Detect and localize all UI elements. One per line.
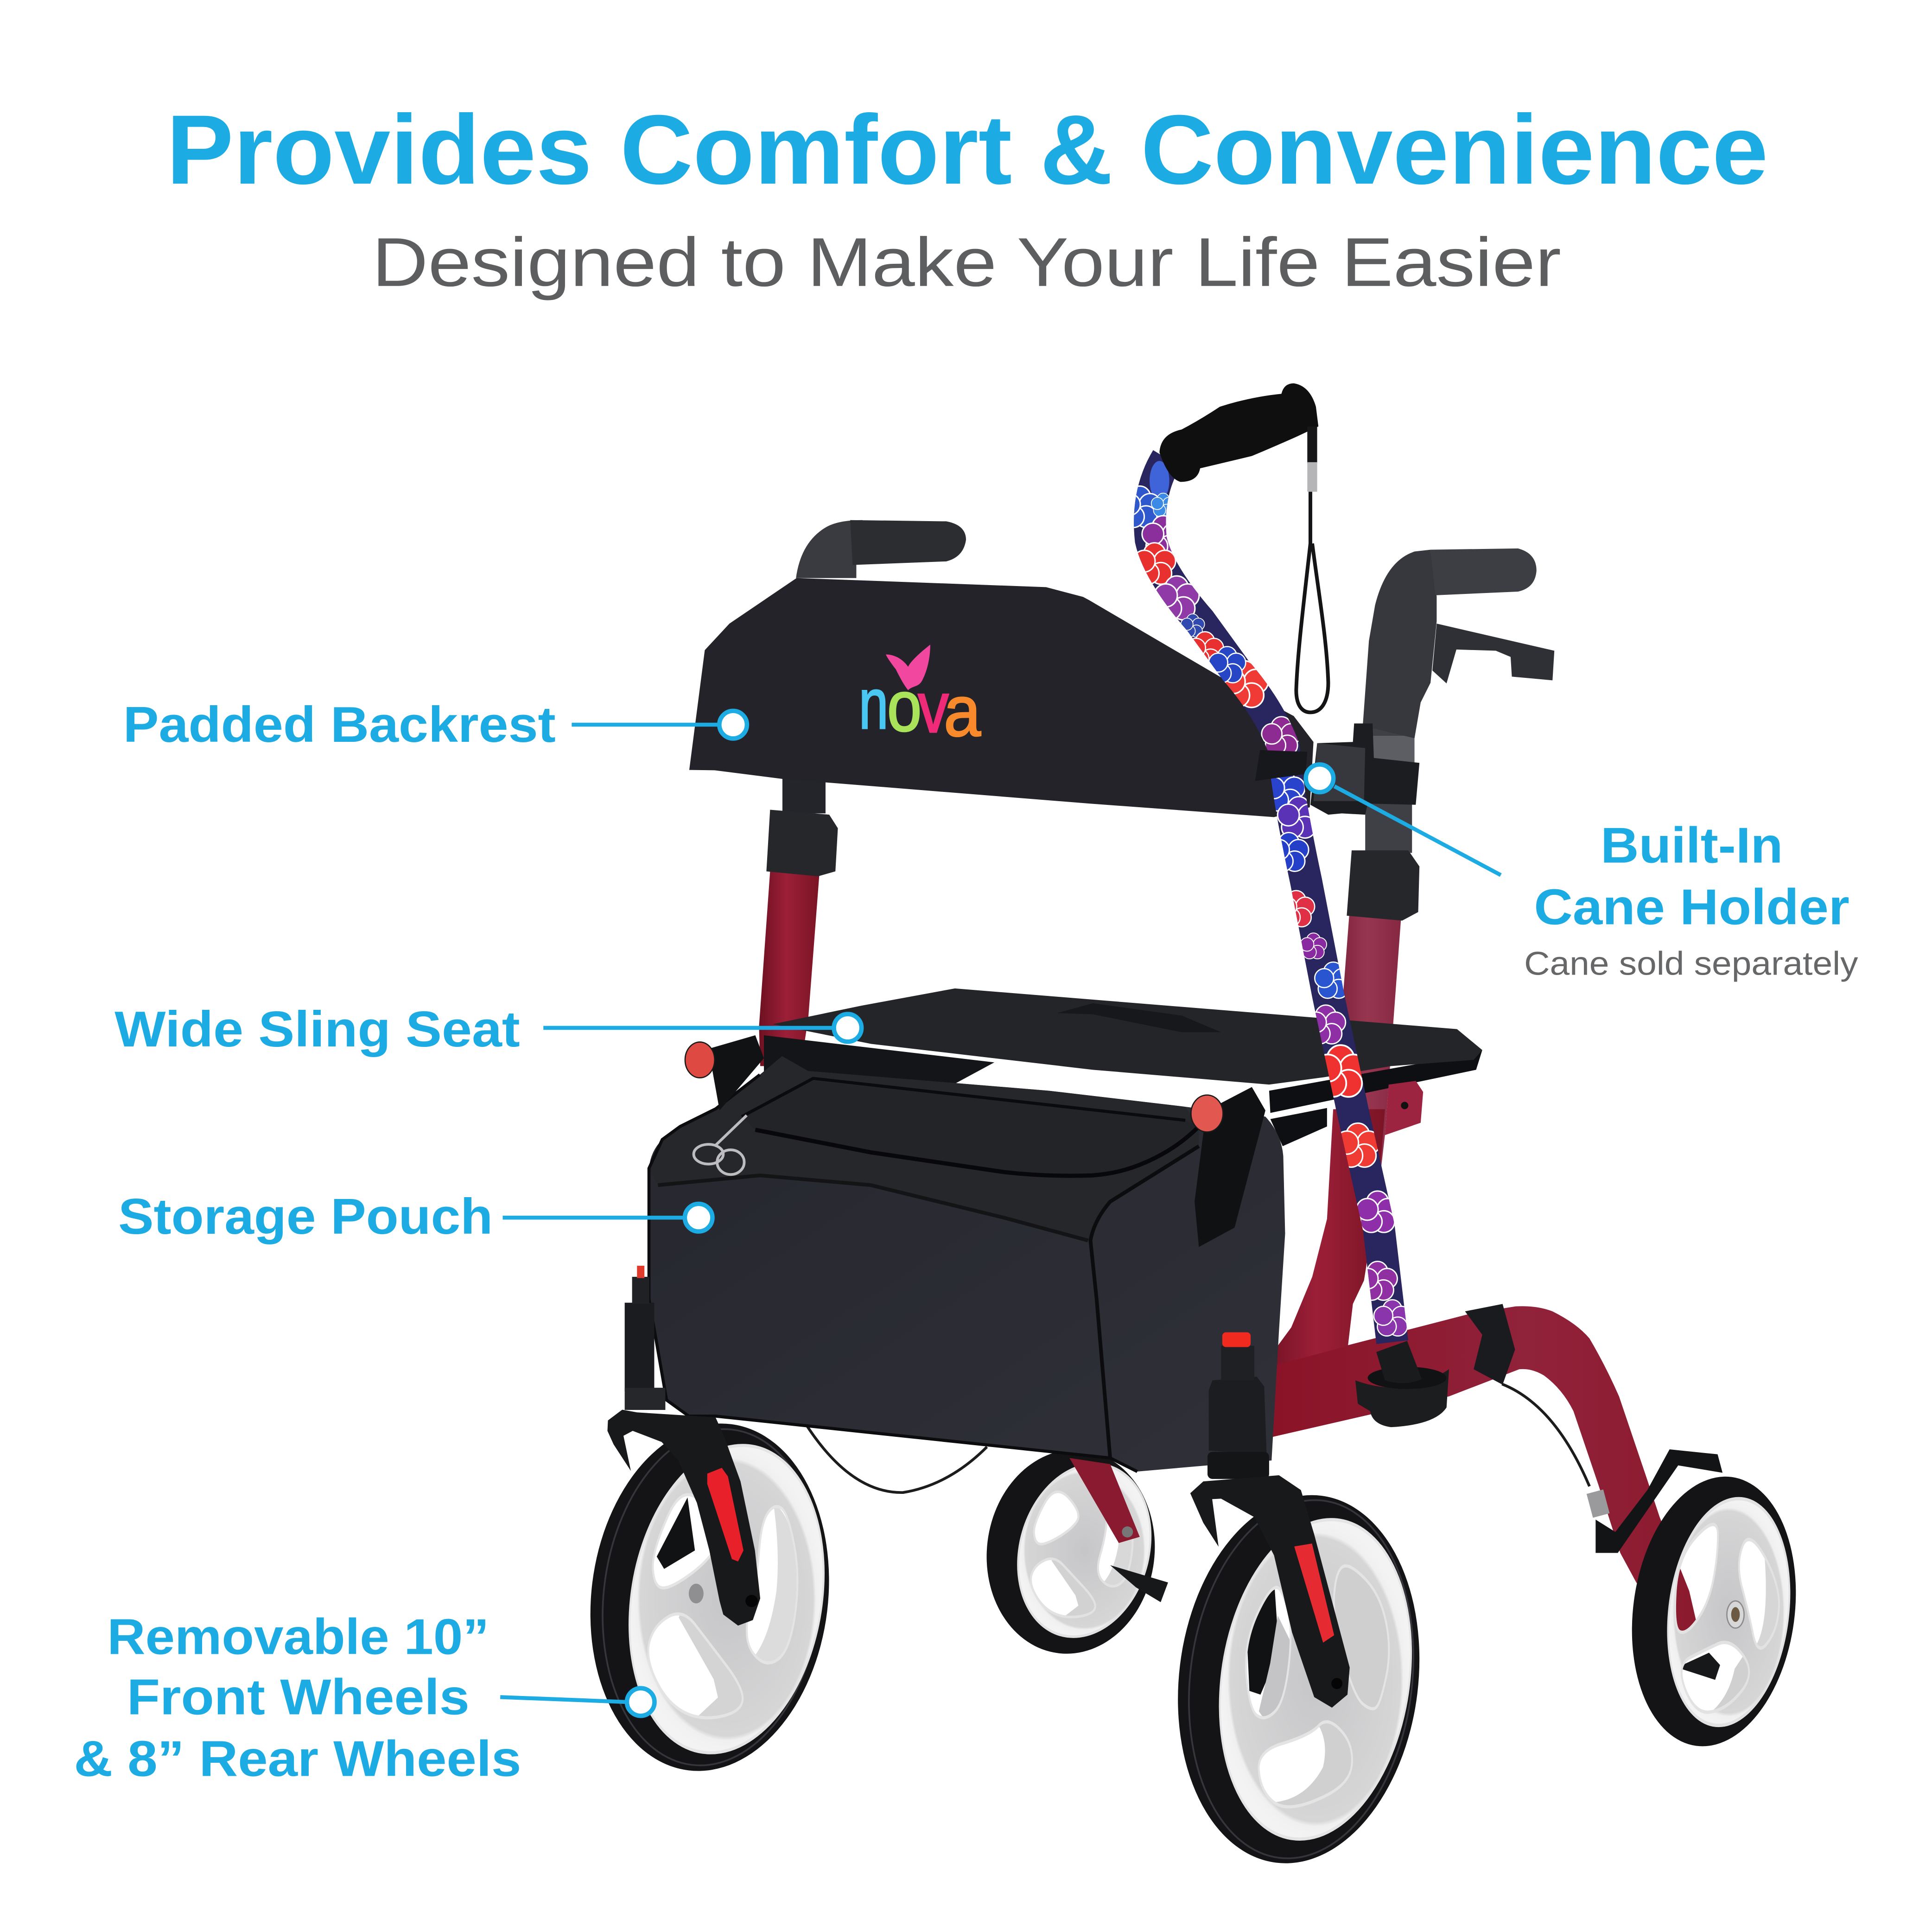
axle bolt <box>1331 1678 1342 1689</box>
callout: wide sling seat <box>114 1001 862 1058</box>
marker dot <box>685 1204 712 1231</box>
frame: rear arch and leg <box>1260 1306 1700 1639</box>
nova logo <box>859 644 981 751</box>
cane band <box>1255 750 1307 781</box>
fork neck <box>625 1388 665 1410</box>
leader line <box>1335 786 1501 875</box>
wide sling seat <box>773 988 1482 1084</box>
dark bar behind <box>1247 1579 1279 1695</box>
right reflector <box>1191 1095 1223 1132</box>
marker dot <box>1306 765 1334 792</box>
left upper column <box>782 777 826 813</box>
leader line <box>572 724 719 726</box>
velcro strap <box>1195 1087 1265 1247</box>
label: Storage Pouch <box>118 1188 493 1245</box>
fork body <box>1190 1475 1350 1708</box>
leader line <box>500 1697 627 1702</box>
right collar <box>1347 850 1419 921</box>
marker dot <box>834 1014 862 1042</box>
pouch top flap <box>649 1056 1199 1240</box>
label: Removable 10” <box>107 1608 489 1665</box>
back wheel, right side <box>1632 1476 1796 1746</box>
front seam <box>1090 1146 1199 1458</box>
left reflector <box>685 1042 715 1078</box>
front wheel, right <box>1157 1481 1440 1877</box>
label: Cane Holder <box>1534 879 1849 936</box>
title: Provides Comfort & Convenience <box>166 95 1768 205</box>
lower seat bar <box>1271 1108 1327 1146</box>
seat handle <box>1057 1003 1221 1032</box>
callout: wheels <box>74 1608 655 1787</box>
rear left leg and brake <box>1069 1458 1168 1602</box>
back wheel, left side <box>986 1453 1155 1654</box>
right fork reflector <box>1294 1543 1334 1643</box>
axle bolt <box>745 1595 758 1607</box>
left upright tube <box>759 871 820 1066</box>
callout: storage pouch <box>118 1188 712 1245</box>
left backrest handle <box>796 520 966 578</box>
zip lid <box>742 1081 1199 1175</box>
front post, left <box>625 1266 654 1391</box>
right upright tube, upper <box>1333 916 1401 1188</box>
flap binding <box>658 1175 1088 1240</box>
cane shaft <box>1150 459 1392 1342</box>
fork, right <box>1190 1475 1350 1708</box>
left collar <box>766 810 838 876</box>
label: & 8” Rear Wheels <box>74 1730 521 1787</box>
label: Wide Sling Seat <box>114 1001 520 1058</box>
seat cross bars <box>764 1035 994 1087</box>
outer binding <box>649 1075 1137 1472</box>
brake lever <box>1432 624 1554 683</box>
label <box>1534 817 1849 936</box>
leader line <box>503 1217 685 1218</box>
frame clamp knob <box>1465 1304 1515 1384</box>
marker dot <box>719 711 747 739</box>
padded backrest <box>689 578 1314 817</box>
cane flower print <box>1119 461 1411 1336</box>
cane holder clamp <box>1310 723 1419 815</box>
tyre <box>571 1410 848 1785</box>
hub bolt <box>689 1584 704 1603</box>
logo letter o: o <box>887 666 922 746</box>
leader line <box>543 1027 834 1029</box>
front post, right <box>1208 1333 1269 1479</box>
label: Front Wheels <box>127 1669 470 1726</box>
logo letter v: v <box>918 667 949 747</box>
tyre <box>1157 1481 1440 1877</box>
right lower column <box>1365 727 1412 853</box>
rear brake bracket <box>1595 1449 1722 1553</box>
fork, left <box>607 1388 760 1626</box>
label: Padded Backrest <box>123 696 556 753</box>
pouch body <box>649 1056 1285 1472</box>
dark bar behind <box>657 1498 695 1569</box>
cane <box>1119 383 1411 1342</box>
rim <box>629 1446 824 1753</box>
right upright tube, lower <box>1260 1109 1385 1369</box>
product photo: rollator with cane <box>571 383 1811 1877</box>
cane foam handle <box>1159 383 1318 482</box>
right grip <box>1430 548 1537 595</box>
rear wheel foot brake <box>1677 1653 1720 1680</box>
marker dot <box>627 1688 655 1716</box>
left reflector arm <box>708 1035 764 1110</box>
brake cables <box>805 1384 1589 1492</box>
icon: butterfly <box>886 644 930 690</box>
zipper <box>755 1127 1199 1176</box>
lid top seam <box>742 1078 1185 1120</box>
red seat bracket <box>1385 1081 1423 1135</box>
front wheel, left <box>571 1410 848 1785</box>
zip rings <box>694 1116 747 1174</box>
left fork reflector <box>707 1468 744 1562</box>
wrist strap <box>1296 427 1328 712</box>
subtitle: Designed to Make Your Life Easier <box>372 223 1561 301</box>
note: Cane sold separately <box>1524 945 1858 982</box>
label <box>74 1608 521 1787</box>
logo letter n: n <box>859 663 889 744</box>
storage pouch <box>649 1056 1285 1472</box>
seat rail <box>1269 1050 1482 1113</box>
cable adjuster <box>1587 1489 1609 1518</box>
right handle body <box>1363 550 1436 738</box>
label: Built-In <box>1601 817 1783 874</box>
logo letter a: a <box>944 671 981 751</box>
right column sleeve <box>1373 736 1415 763</box>
fork body <box>607 1409 760 1626</box>
cane cup <box>1355 1341 1449 1427</box>
callout: cane holder <box>1306 765 1858 982</box>
rim <box>1220 1520 1411 1839</box>
callout: padded backrest <box>123 696 747 753</box>
